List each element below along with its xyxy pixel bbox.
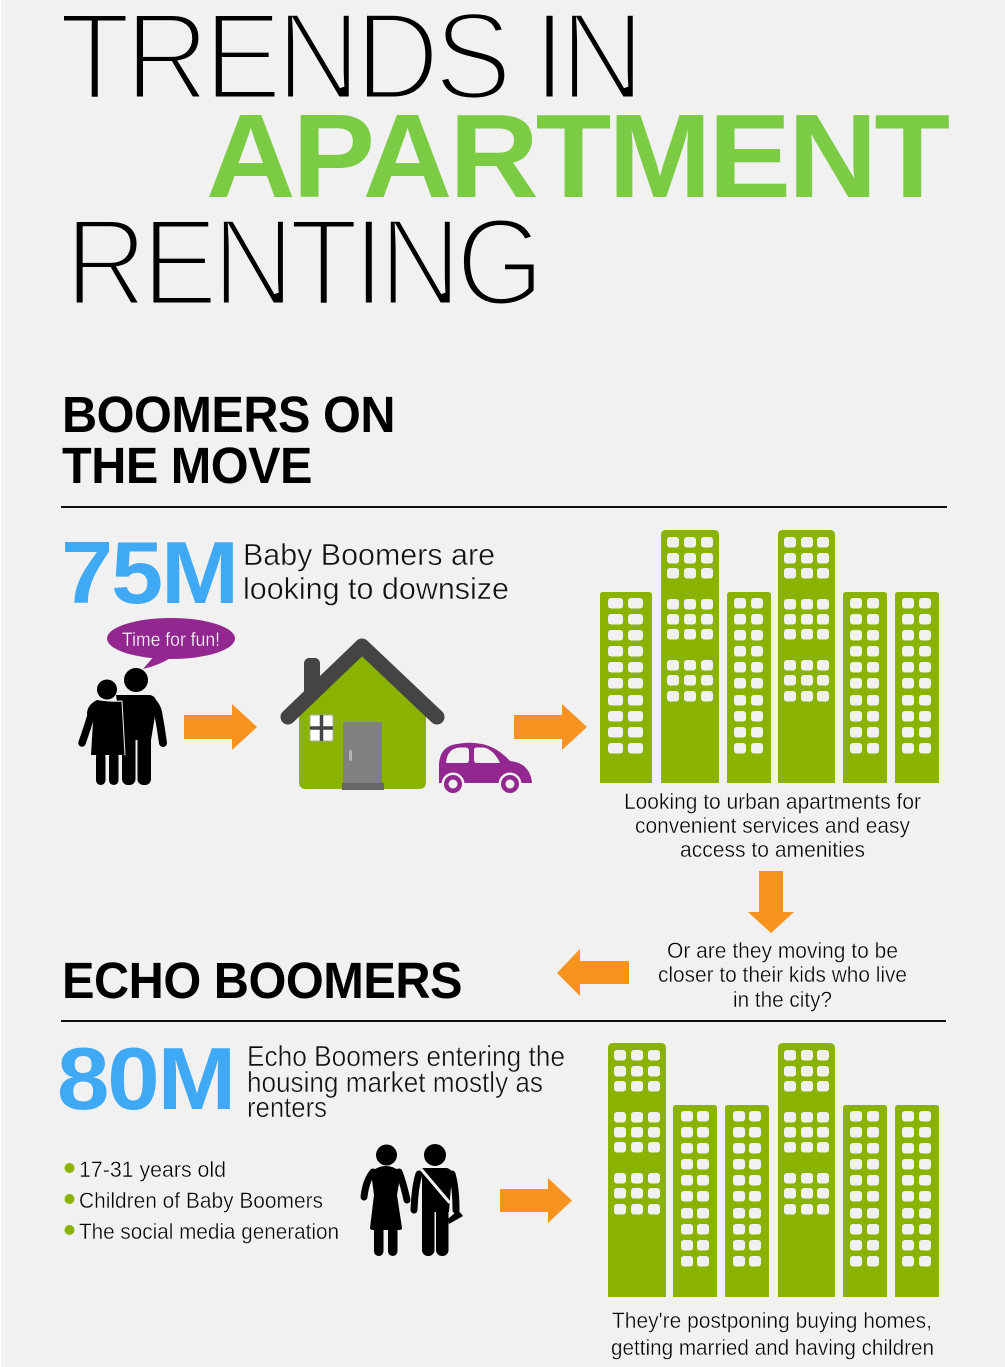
title line: apartment: APARTMENT [206,90,949,223]
stat: 75M baby boomers: looking to downsize [243,571,509,606]
icon: car [439,743,532,796]
chart: renter skyline [608,1043,939,1297]
arrow: house to apartments [514,704,587,750]
building 5 [843,592,887,783]
stat: 75M baby boomers: 75M [61,523,237,622]
text: closer to kids: Or are they moving to be [667,938,898,963]
text: closer to kids [658,938,907,1012]
stat: 80M echo boomers [57,1029,565,1128]
text: urban apartments: Looking to urban apartments for [624,789,921,814]
icon: young couple [364,1144,463,1256]
speech bubble: time for fun [107,618,235,669]
text: closer to kids: closer to their kids who live [658,962,907,987]
stat: 80M echo boomers: housing market mostly as [247,1067,543,1099]
building 1 [608,1043,666,1297]
building 6 [895,1105,939,1297]
text: urban apartments: access to amenities [680,837,865,862]
heading: echo boomers: ECHO BOOMERS [62,952,462,1009]
arrow: down [748,871,794,933]
heading: boomers on the move [62,386,395,494]
building 6 [895,592,939,783]
icon: older couple [82,668,163,785]
bullet list: echo boomer traits: Children of Baby Boomers [79,1188,323,1213]
text: urban apartments: convenient services and easy [635,813,910,838]
icon: house [288,646,437,790]
text: postponing buying homes: They're postponing buying homes, [612,1308,932,1333]
building 3 [725,1105,769,1297]
building 3 [727,592,771,783]
chart: urban apartment skyline [600,530,939,783]
bullet list: echo boomer traits [64,1157,339,1244]
title line: renting: RENTING [65,194,539,332]
building 5 [843,1105,887,1297]
arrow: young couple to apartments [500,1178,572,1223]
text: closer to kids: in the city? [733,987,832,1012]
heading: boomers on the move: BOOMERS ON [62,386,395,443]
building 2 [673,1105,717,1297]
stat: 80M echo boomers: renters [247,1092,327,1124]
stat: 80M echo boomers: Echo Boomers entering the [247,1041,565,1073]
arrow: couple to house [184,704,257,750]
building 4 [778,1043,835,1297]
text: postponing buying homes [611,1308,934,1360]
heading: boomers on the move: THE MOVE [62,437,312,494]
building 4 [778,530,835,783]
bullet list: echo boomer traits: The social media generation [79,1219,339,1244]
arrow: left [557,949,629,996]
speech bubble: time for fun: Time for fun! [122,629,220,651]
text: postponing buying homes: getting married and having children [611,1335,934,1360]
stat: 75M baby boomers: Baby Boomers are [243,537,495,572]
building 2 [661,530,719,783]
text: urban apartments [624,789,921,862]
bullet list: echo boomer traits: 17-31 years old [79,1157,226,1182]
stat: 80M echo boomers: 80M [57,1029,234,1128]
building 1 [600,592,652,783]
title [59,0,949,332]
stat: 75M baby boomers [61,523,509,622]
